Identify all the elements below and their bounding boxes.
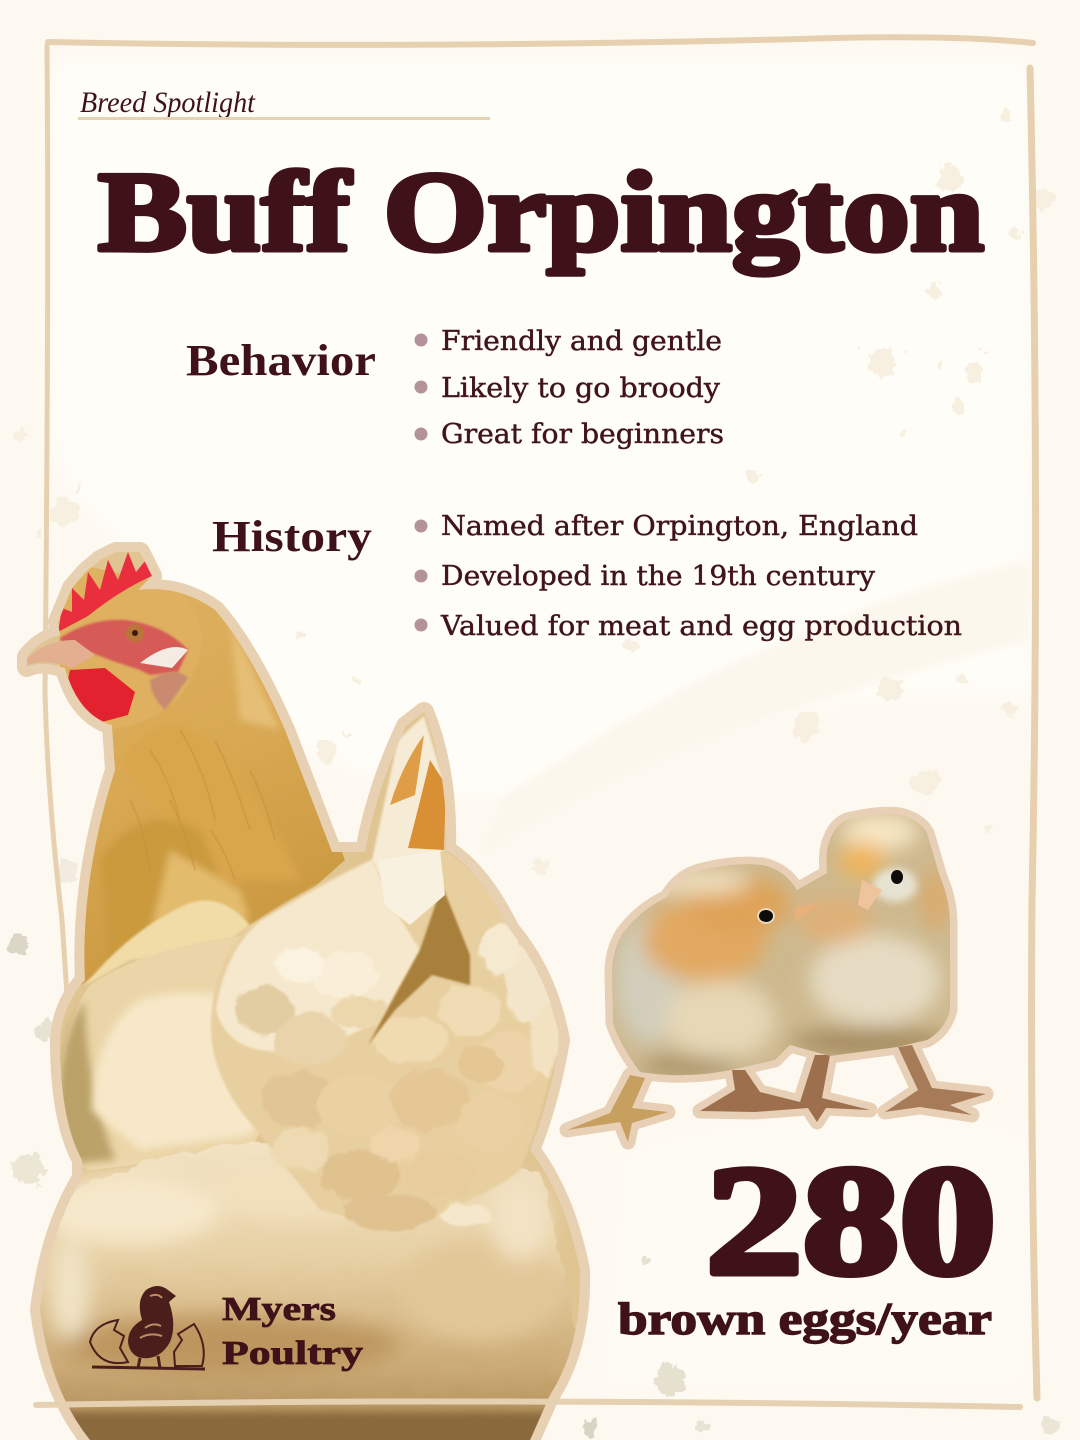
title: Buff Orpington (98, 148, 984, 275)
chick sticker outline (567, 814, 986, 1142)
list: behavior bullets: Likely to go broody (441, 373, 721, 404)
hen plumage (27, 552, 580, 1440)
chick legs (567, 1045, 986, 1142)
stat number: 280 (706, 1134, 996, 1307)
heading: History: History (212, 512, 372, 561)
eye (126, 624, 144, 642)
comb (58, 552, 152, 632)
list: behavior bullets: Great for beginners (441, 419, 724, 450)
list: history bullets: Valued for meat and egg production (440, 611, 962, 642)
list: behavior bullets (414, 326, 724, 450)
wing base (211, 850, 558, 1230)
lower fluffy body (20, 1143, 600, 1440)
eyebrow: Breed Spotlight (78, 86, 490, 120)
dark gap under tail (368, 885, 470, 1045)
bottom frame line (36, 1401, 1020, 1407)
stat label: brown eggs/year (618, 1294, 992, 1344)
logo: Myers Poultry: Poultry (222, 1335, 363, 1372)
stat: 280 brown eggs per year (618, 1134, 996, 1344)
neck feather strokes (130, 730, 275, 880)
eyebrow: Breed Spotlight: Breed Spotlight (80, 86, 256, 119)
body mid (61, 936, 259, 1170)
chick bodies (612, 814, 950, 1076)
list: history bullets (414, 511, 962, 642)
feathers (235, 924, 559, 1230)
list: behavior bullets: Friendly and gentle (441, 326, 722, 357)
section: History (212, 511, 962, 642)
beak (27, 640, 95, 668)
illustration: two chicks (567, 800, 986, 1142)
list: history bullets: Named after Orpington, England (441, 511, 918, 542)
shoulder patch (85, 900, 250, 985)
chick faces (757, 870, 903, 924)
section: Behavior (186, 326, 724, 450)
tail feathers (371, 716, 446, 877)
head (104, 589, 196, 730)
face (60, 620, 188, 675)
logo: Myers Poultry (90, 1286, 363, 1372)
illustration: hen (0, 520, 600, 1440)
heading: Behavior: Behavior (186, 336, 376, 385)
neck and breast (60, 560, 345, 1000)
logo wordmark: Myers (222, 1291, 336, 1328)
wattle (66, 668, 135, 722)
icon: chick hatching from eggshells (90, 1286, 205, 1369)
hen sticker outline (27, 552, 580, 1440)
list: history bullets: Developed in the 19th century (441, 561, 876, 592)
